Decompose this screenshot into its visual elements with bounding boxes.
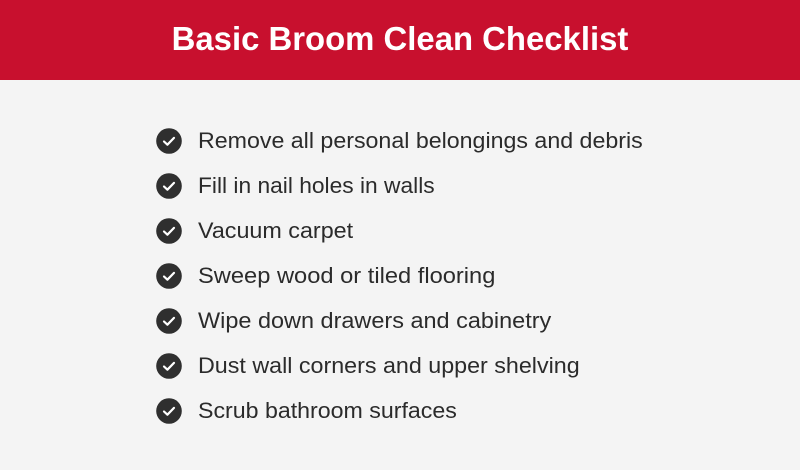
checklist bbox=[156, 128, 643, 424]
checklist item: dust corners: Dust wall corners and upper shelving bbox=[198, 353, 580, 378]
checklist item: scrub bathroom: Scrub bathroom surfaces bbox=[198, 398, 457, 423]
checklist item: wipe drawers: Wipe down drawers and cabinetry bbox=[198, 308, 551, 333]
checklist item: vacuum carpet: Vacuum carpet bbox=[198, 218, 353, 243]
header band bbox=[0, 0, 800, 80]
checklist item: sweep flooring: Sweep wood or tiled flooring bbox=[198, 263, 495, 288]
checklist item: fill nail holes: Fill in nail holes in walls bbox=[198, 173, 435, 198]
title: Basic Broom Clean Checklist bbox=[172, 20, 628, 57]
checklist item: remove belongings: Remove all personal belongings and debris bbox=[198, 128, 643, 153]
